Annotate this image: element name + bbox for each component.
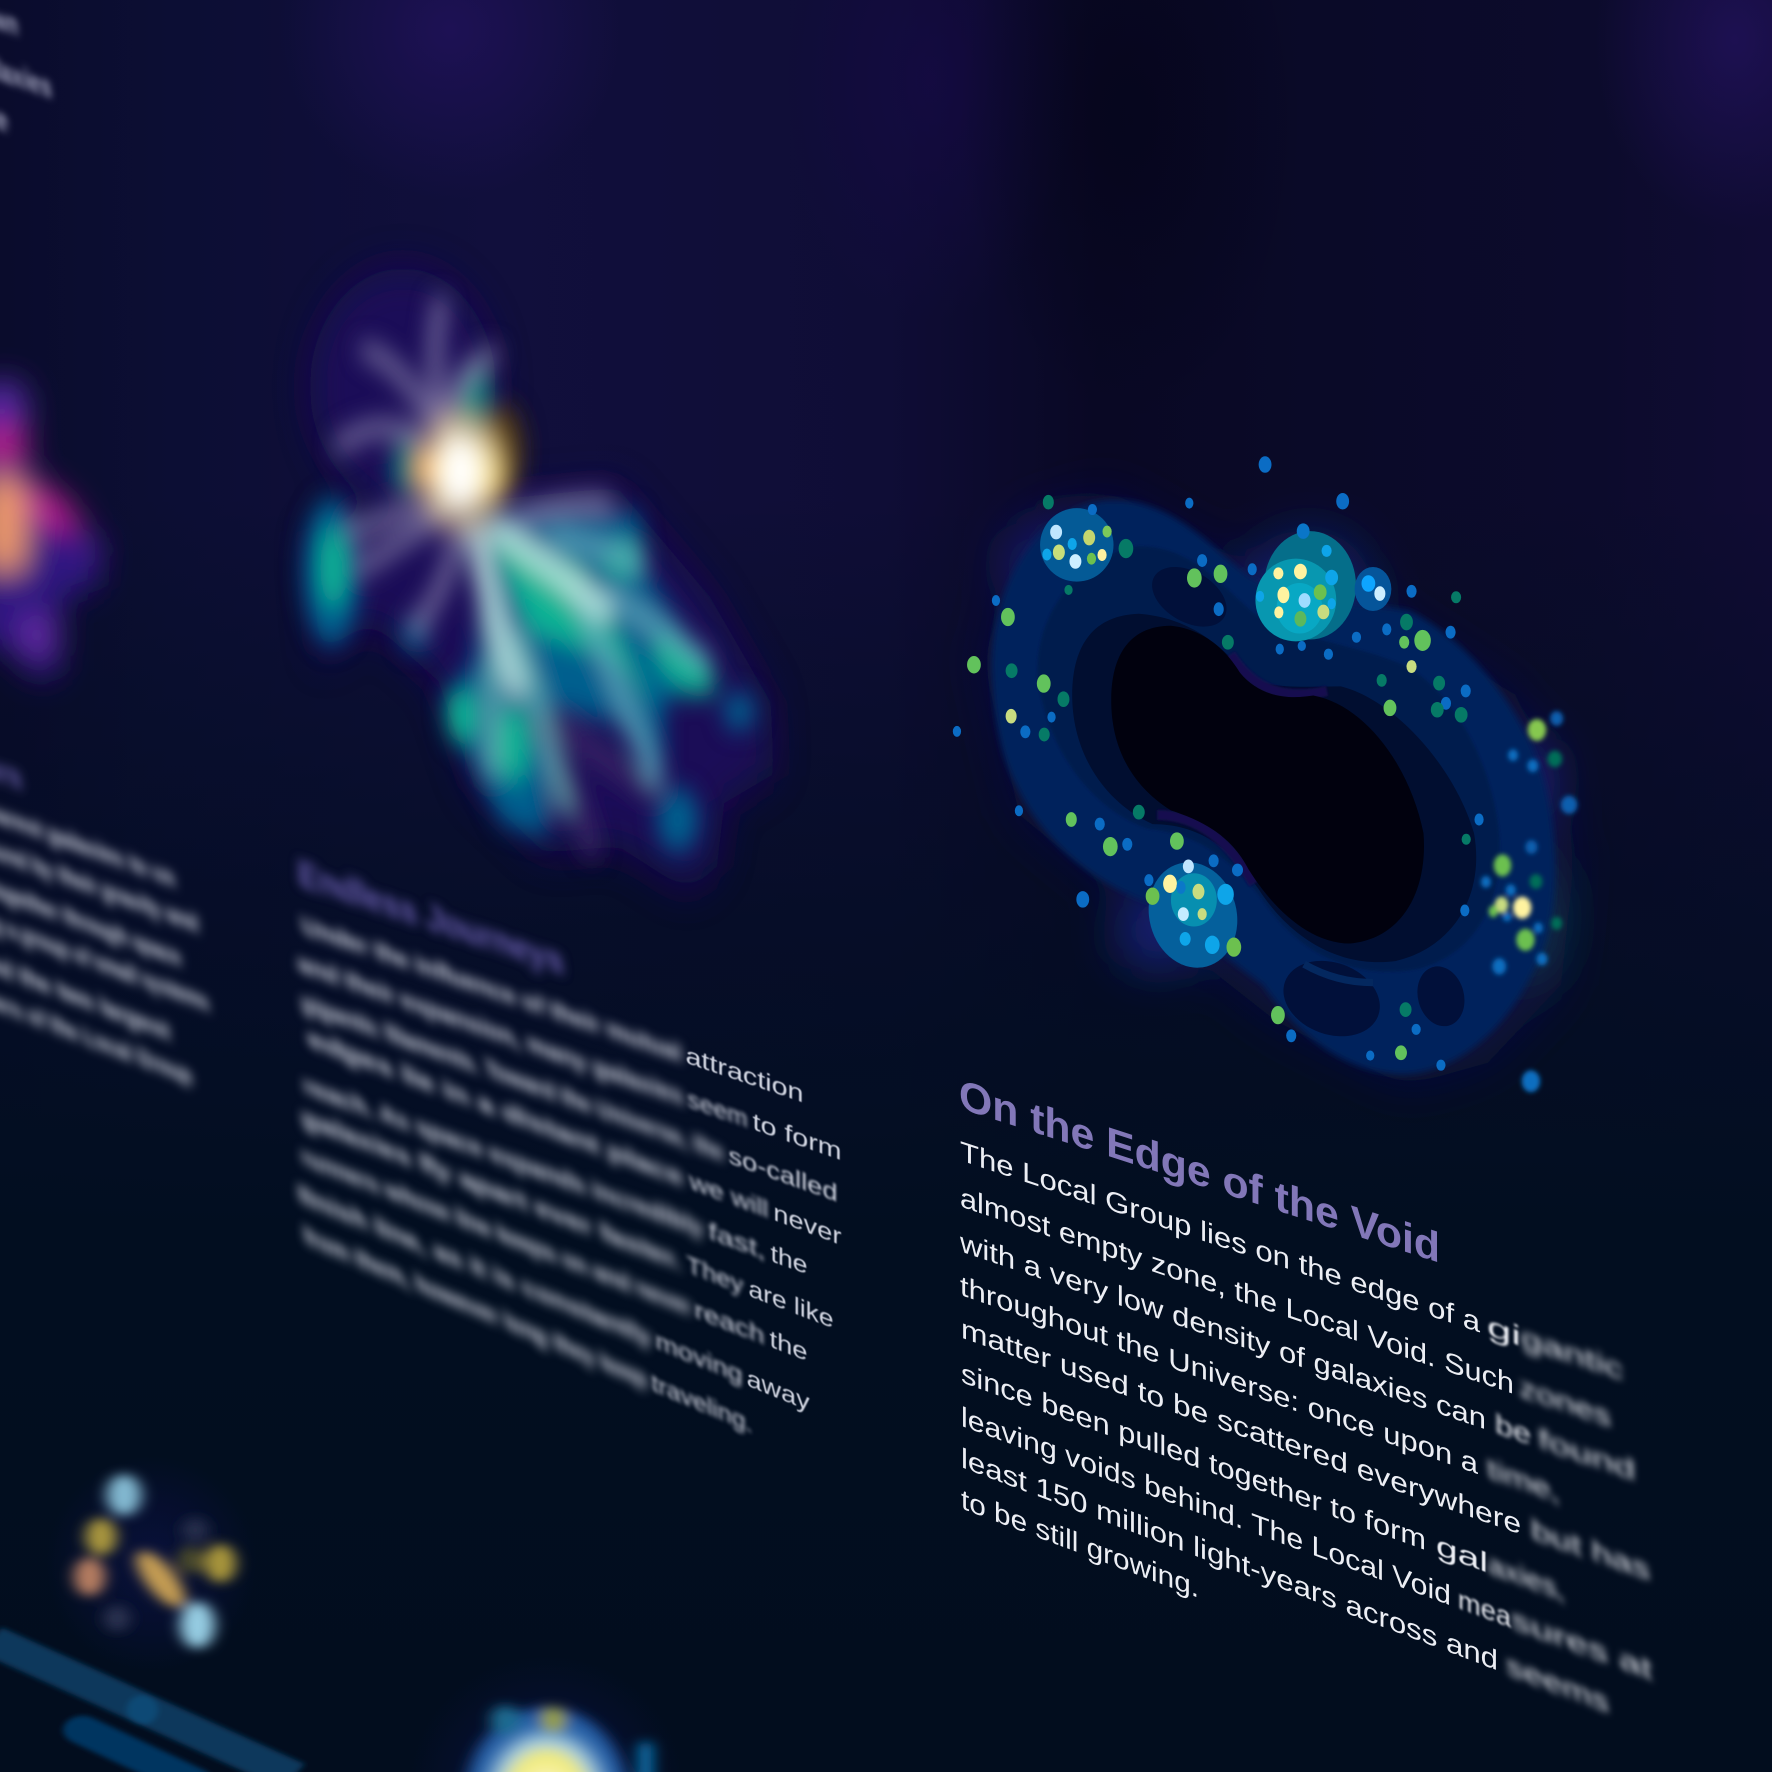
- body: middle column: and their expansion, many galaxies: [298, 950, 684, 1111]
- body: middle column: from them, however long they keep: [304, 1222, 648, 1394]
- scattered galaxies: dark green: [1006, 495, 1471, 1017]
- heading: On the Edge of the Void: [959, 1071, 1440, 1273]
- body: middle column: reach. As space expands incredibly: [304, 1073, 704, 1243]
- out-of-focus galaxies: right edge: [1481, 711, 1577, 1092]
- body: middle column: so-called: [729, 1143, 838, 1208]
- text block: middle column: [298, 853, 842, 1439]
- green plumes: [320, 358, 724, 782]
- body: middle column: gigantic filaments. Toward the Universe, the: [302, 990, 724, 1167]
- body: middle column: are like: [748, 1275, 834, 1334]
- body: middle column: moving: [656, 1327, 743, 1390]
- text block: top-left fragments: [0, 0, 52, 139]
- body paragraph: with a very low density of galaxies can: [959, 1227, 1486, 1436]
- body: middle column: the: [769, 1325, 807, 1367]
- body: middle column: attraction: [686, 1042, 804, 1109]
- scattered galaxies: blue: [953, 456, 1484, 1071]
- illustration: bottom-left filament lines: [0, 1640, 294, 1772]
- cluster: lower left: [1137, 852, 1249, 978]
- inner ring: [1072, 614, 1476, 962]
- body: middle column: never: [773, 1200, 841, 1251]
- cluster: top centre: [1255, 523, 1391, 641]
- body paragraph: The Local Group lies on the edge of a: [960, 1136, 1480, 1339]
- body paragraph: since been pulled together to form: [961, 1358, 1426, 1557]
- body paragraph: to be still growing.: [961, 1484, 1199, 1605]
- body: middle column: Under the influence of their mutual: [302, 913, 682, 1067]
- void rim: [1157, 654, 1327, 884]
- scattered galaxies: pale: [1006, 660, 1417, 724]
- body paragraph: seems: [1506, 1649, 1609, 1719]
- body: middle column: we will: [688, 1168, 768, 1224]
- middle ring: [1037, 546, 1500, 972]
- body: middle column: galaxies fly apart ever faster.: [302, 1103, 681, 1276]
- body: middle column: away: [747, 1364, 810, 1417]
- body paragraph: throughout the Universe: once upon a: [960, 1271, 1479, 1481]
- cluster: upper left: [1040, 508, 1114, 582]
- body: middle column: reach: [694, 1296, 764, 1350]
- blue-teal wash: [303, 498, 755, 852]
- central void: [1111, 626, 1424, 943]
- illustration: left galaxy (cropped, magenta and orange): [0, 380, 102, 682]
- heading: middle column: Endless Journeys: [298, 853, 564, 982]
- illustration: Local Void map: [953, 456, 1577, 1092]
- body paragraph: but has: [1531, 1514, 1650, 1587]
- body: middle column: fast,: [708, 1218, 765, 1265]
- body: middle column: They: [686, 1251, 744, 1300]
- body paragraph: [959, 1136, 1652, 1719]
- body paragraph: found: [1538, 1423, 1635, 1487]
- body paragraph: time,: [1487, 1453, 1560, 1509]
- glow halo: [983, 489, 1575, 1086]
- text block: On the Edge of the Void: [959, 1071, 1652, 1719]
- illustration: bottom-left star cluster: [46, 1457, 257, 1670]
- body: middle column: the: [770, 1241, 808, 1280]
- body: middle column: finish line, as it is constantly: [298, 1181, 652, 1352]
- body paragraph: gi: [1487, 1310, 1521, 1353]
- body paragraph: matter used to be scattered everywhere: [961, 1313, 1521, 1541]
- body paragraph: sures at: [1511, 1603, 1652, 1686]
- body: left column: [0, 782, 209, 1091]
- body paragraph: gantic: [1521, 1322, 1623, 1387]
- body paragraph: axies,: [1488, 1549, 1565, 1607]
- body paragraph: be: [1495, 1408, 1531, 1452]
- body paragraph: mea: [1458, 1584, 1512, 1635]
- outer ring: [992, 500, 1555, 1074]
- body paragraph: gal: [1436, 1530, 1488, 1580]
- scattered galaxies: green: [967, 565, 1431, 1060]
- body paragraph: zones: [1519, 1371, 1611, 1434]
- body: middle column: edges lie in a distant place: [307, 1025, 683, 1192]
- bright core: [408, 401, 524, 540]
- text block: left column: [0, 719, 209, 1091]
- light rays: [340, 304, 703, 849]
- body paragraph: least 150 million light-years across and: [961, 1443, 1498, 1677]
- body: middle column: runners whose line keeps on and never: [302, 1143, 692, 1322]
- body: middle column: [298, 913, 842, 1439]
- purple halo: [310, 268, 774, 891]
- body paragraph: almost empty zone, the Local Void. Such: [960, 1182, 1514, 1401]
- illustration: middle galaxy with rays: [303, 268, 774, 891]
- body paragraph: leaving voids behind. The Local Void: [961, 1402, 1451, 1612]
- illustration: bottom star: [409, 1657, 684, 1772]
- body: middle column: seem: [688, 1086, 748, 1133]
- body: middle column: traveling.: [652, 1369, 753, 1439]
- body: middle column: to form: [753, 1109, 842, 1166]
- small voids: [1142, 555, 1471, 1049]
